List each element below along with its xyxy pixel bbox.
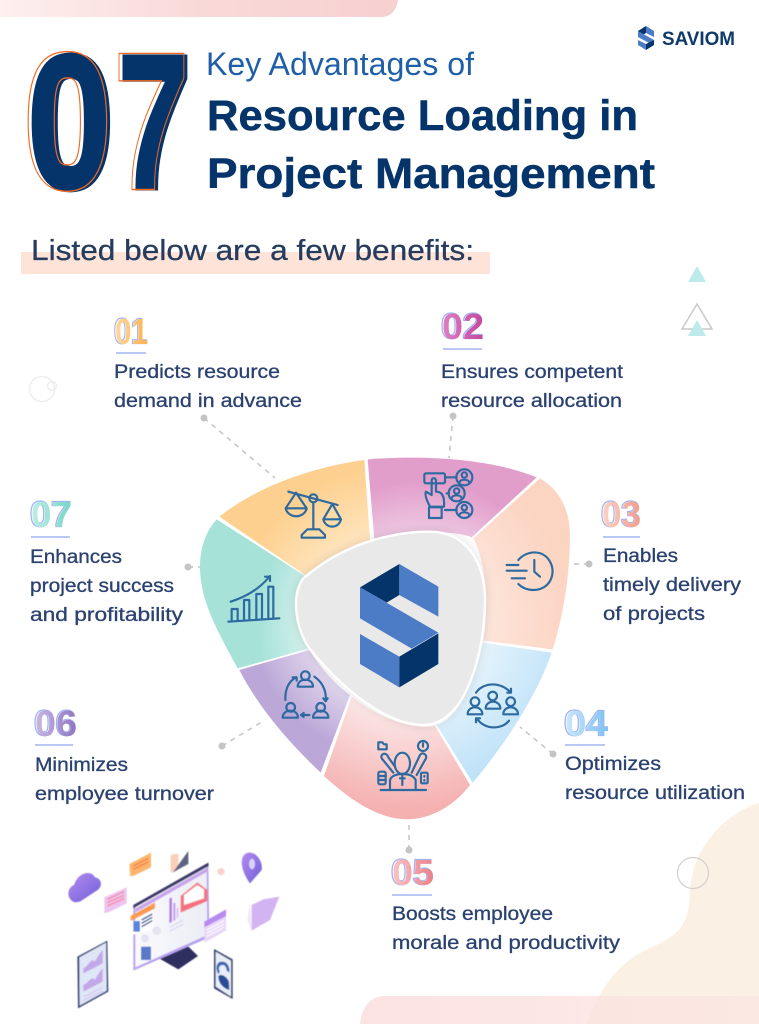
- benefit 03: timely delivery: [603, 575, 742, 596]
- decorative circles: left: [30, 376, 56, 402]
- location pin: [242, 853, 262, 883]
- benefit 01: demand in advance: [114, 391, 302, 412]
- center logo: [360, 564, 438, 687]
- benefit 07: Enhances: [30, 547, 122, 568]
- benefit 06: [34, 702, 215, 805]
- top pink bar: [0, 0, 398, 17]
- logo: Saviom: [638, 26, 735, 50]
- chat bubble orange: [129, 853, 151, 876]
- benefit 02: [440, 306, 624, 412]
- benefit 04: resource utilization: [565, 783, 745, 804]
- icon: multitasking person: [378, 741, 428, 790]
- monitor: [131, 863, 209, 971]
- segment 7: teal: [200, 519, 309, 668]
- cloud: [68, 873, 101, 902]
- benefit 03: [600, 494, 742, 625]
- benefit 04: 04: [565, 703, 608, 744]
- center shape: [296, 532, 485, 725]
- title: [206, 46, 655, 198]
- segment 1: orange: [219, 460, 370, 576]
- folder: [247, 897, 279, 931]
- decorative triangles: [682, 266, 712, 336]
- title: Project Management: [207, 150, 655, 198]
- benefit 06: 06: [35, 703, 77, 744]
- chat bubble pink: [104, 887, 127, 913]
- benefit 03: 03: [602, 494, 641, 535]
- document: [171, 851, 188, 873]
- benefit 07: 07: [30, 494, 72, 534]
- gear: [217, 868, 225, 875]
- icon: rotation: [283, 671, 328, 718]
- benefit 01: 01: [115, 311, 148, 352]
- benefit 05: Boosts employee: [392, 904, 553, 925]
- segment 2: pink: [368, 458, 537, 539]
- benefit 05: 05: [390, 852, 434, 892]
- benefit 02: 02: [442, 306, 484, 347]
- benefit 03: of projects: [603, 604, 705, 625]
- phone: [214, 949, 233, 999]
- segmented wheel: [200, 458, 570, 819]
- big number 07: [28, 50, 188, 192]
- benefit 06: Minimizes: [35, 755, 128, 776]
- icon: scales: [286, 492, 341, 538]
- logo: Saviom: SAVIOM: [662, 29, 735, 50]
- icon: team cycle: [468, 684, 518, 727]
- benefit 07: [30, 494, 184, 626]
- benefit 06: employee turnover: [35, 784, 215, 805]
- segment 3: peach: [473, 478, 570, 649]
- bottom cream blob: [587, 803, 759, 1024]
- benefit 04: 04: [564, 702, 608, 744]
- subheading with highlight: Listed below are a few benefits:: [31, 235, 474, 267]
- tablet: [77, 941, 108, 1008]
- benefit 02: Ensures competent: [441, 362, 624, 383]
- benefit 03: Enables: [603, 546, 678, 567]
- big number 07: 7: [119, 18, 191, 228]
- segment 4: blue: [437, 643, 552, 783]
- icon: assigning people: [424, 469, 472, 518]
- big number 07: 0: [28, 18, 114, 228]
- title: Resource Loading in: [207, 92, 638, 140]
- benefit 04: [564, 702, 745, 804]
- benefit 02: 02: [440, 306, 484, 346]
- benefit 02: resource allocation: [441, 391, 622, 412]
- segment 6: purple: [239, 650, 350, 773]
- icon: clock: [507, 552, 553, 590]
- benefit 01: Predicts resource: [114, 362, 280, 383]
- benefit 01: [114, 310, 302, 412]
- benefit 05: morale and productivity: [392, 933, 621, 954]
- illustration: devices and dashboard: [68, 851, 279, 1008]
- benefit 07: project success: [30, 576, 174, 597]
- bottom pink bar: [360, 996, 759, 1024]
- benefit 04: Optimizes: [565, 754, 661, 775]
- benefit 03: 03: [600, 494, 640, 534]
- segment 5: salmon: [324, 697, 470, 819]
- icon: growth chart: [228, 576, 279, 622]
- connector lines: [184, 412, 592, 854]
- title: Key Advantages of: [206, 46, 474, 82]
- benefit 07: 07: [31, 494, 72, 535]
- benefit 01: 01: [114, 310, 148, 352]
- floating panel: [204, 909, 226, 943]
- benefit 06: 06: [34, 702, 76, 744]
- benefit 05: [390, 852, 621, 954]
- benefit 05: 05: [392, 852, 434, 893]
- decorative circle: lower right: [678, 858, 708, 888]
- monitor stand: [157, 945, 198, 969]
- benefit 07: and profitability: [30, 605, 184, 626]
